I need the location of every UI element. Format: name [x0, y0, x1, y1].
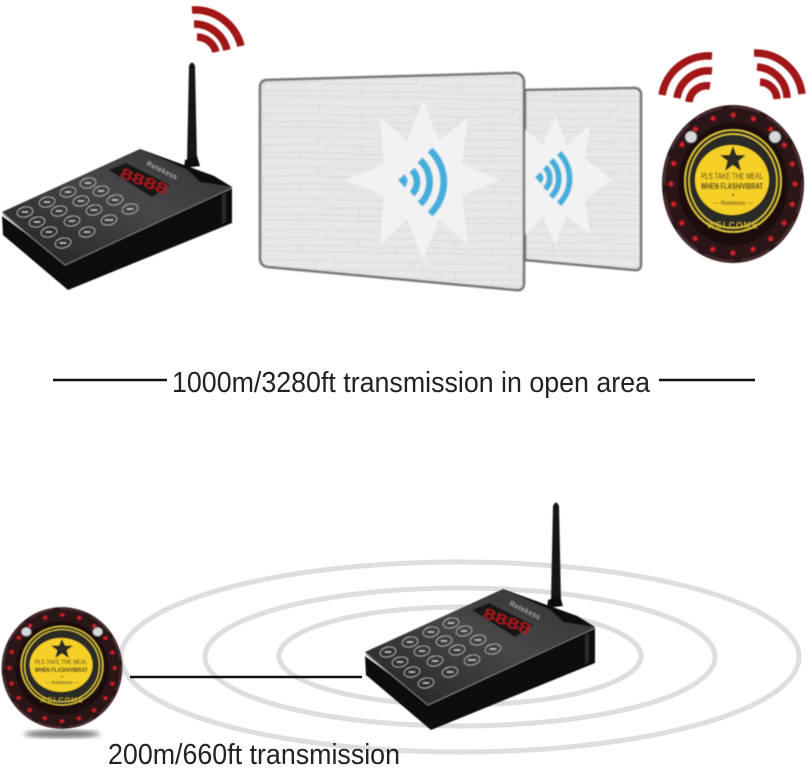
top panel: [365, 589, 595, 705]
pager 2 yellow disc: [30, 638, 93, 692]
keypad buttons: [16, 176, 139, 250]
pager 2 screws: [21, 627, 31, 636]
pager 2 LEDs: [9, 615, 115, 721]
brand label: Retekess: [508, 601, 541, 621]
pager 2 text: PLS TAKE THE MEAL: [35, 659, 88, 666]
pager star: [720, 146, 746, 171]
pager body: [662, 105, 804, 263]
display: [109, 163, 170, 197]
card 2 wifi icon: [535, 153, 570, 204]
pager top: [662, 105, 804, 263]
transmitter top: [2, 62, 232, 290]
pager 2 body: [2, 607, 122, 729]
pager bottom: WHEN FLASH/VIBRAT: [35, 667, 88, 674]
display: [472, 603, 533, 637]
antenna: [551, 502, 561, 602]
display digits: 8888: [118, 165, 170, 199]
card 1 wifi icon: [398, 150, 444, 214]
pager 2 label rings: [21, 626, 103, 705]
pager bottom: — Retekess —: [45, 680, 79, 686]
connection line: [130, 676, 362, 678]
pager top: — Retekess —: [713, 201, 753, 207]
pager yellow disc: [695, 145, 769, 215]
pager shadow: [24, 730, 100, 738]
pager label rings: [685, 130, 781, 232]
pager text: PLS TAKE THE MEAL: [701, 172, 763, 181]
range line: left: [53, 379, 167, 381]
signal waves: pager top left: [662, 56, 712, 102]
pager 2 star: [51, 639, 73, 658]
range caption: open area: 1000m/3280ft transmission in open area: [172, 367, 651, 399]
antenna: [187, 62, 197, 162]
range caption: 200m: 200m/660ft transmission: [108, 739, 400, 771]
pager screws: [685, 131, 697, 143]
keypad buttons: [379, 616, 502, 690]
card 2 star: [524, 118, 610, 244]
base body: [365, 627, 595, 730]
card 1 background: [260, 73, 524, 290]
transmitter bottom: [365, 502, 595, 730]
signal waves: pager top right: [754, 53, 802, 99]
card 1 star: [345, 100, 500, 260]
card 2 background: [525, 88, 641, 270]
range line: right: [659, 379, 755, 381]
pager bottom: [2, 607, 122, 738]
pager 2 welcome text: WELCOME: [40, 697, 84, 704]
signal waves: transmitter top: [192, 10, 241, 52]
display digits: 8888: [481, 605, 533, 639]
brand label: Retekess: [145, 161, 178, 181]
pager LEDs: [671, 115, 795, 253]
top panel: [2, 149, 232, 265]
pager top: WHEN FLASH/VIBRAT: [701, 182, 763, 191]
base body: [2, 187, 232, 290]
pager welcome text: WELCOME: [707, 221, 759, 230]
concentric range ellipses: [121, 562, 799, 752]
brick card: large: [260, 73, 641, 290]
